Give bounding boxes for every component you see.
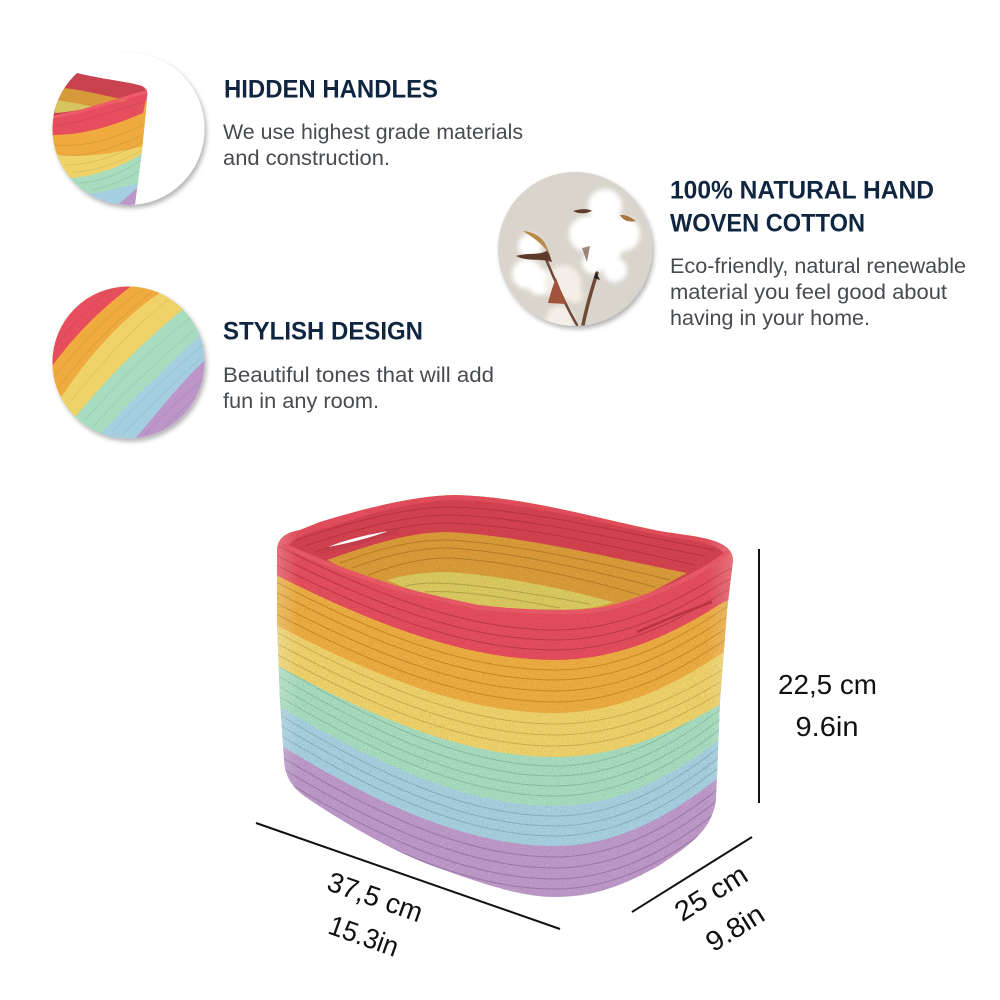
- heading: natural hand woven cotton: 100% NATURAL HAND: [670, 176, 934, 204]
- text block: stylish design description: Beautiful tones that will add: [223, 364, 494, 387]
- band: blue: [277, 628, 724, 846]
- illustration: rainbow rope basket: [277, 495, 733, 897]
- dimension: length label: 37,5 cm: [323, 866, 427, 928]
- text block: hidden handles description: We use highest grade materials: [223, 121, 523, 144]
- text block: cotton description: Eco-friendly, natural renewable: [670, 255, 966, 278]
- dimension: height line: [758, 549, 760, 803]
- text block: stylish design description: fun in any room.: [223, 390, 379, 413]
- heading: stylish design: STYLISH DESIGN: [223, 318, 423, 346]
- dimension: width label: 9.8in: [700, 898, 770, 958]
- rope texture: [270, 490, 740, 900]
- rim edge: [285, 546, 727, 612]
- band: yellow: [270, 480, 735, 757]
- heading: natural hand woven cotton: [670, 176, 934, 238]
- dimension: width label: [669, 859, 770, 958]
- dimension: length label: [323, 866, 427, 963]
- dimension: length label: 15.3in: [325, 909, 403, 963]
- basket interior: [288, 500, 725, 612]
- dimension: height label: [778, 669, 877, 742]
- handle: left slot: [320, 531, 398, 552]
- panel: stylish design feature: [40, 280, 494, 445]
- panel: hidden handles feature: [40, 53, 523, 210]
- band: red rim: [277, 495, 733, 660]
- text block: stylish design description: [223, 364, 494, 413]
- band: mint: [277, 628, 724, 806]
- text block: hidden handles description: and construction.: [223, 147, 390, 170]
- band: purple: [277, 628, 724, 897]
- text block: hidden handles description: [223, 121, 523, 170]
- text block: cotton description: having in your home.: [670, 307, 870, 330]
- dimension: height label: 9.6in: [796, 711, 858, 742]
- icon: basket corner circle: [40, 53, 204, 210]
- heading: hidden handles: HIDDEN HANDLES: [224, 76, 438, 104]
- handle: right slot: [637, 602, 712, 632]
- icon: rainbow rope circle: [52, 286, 209, 444]
- band: orange: [270, 480, 735, 713]
- dimension: width label: 25 cm: [669, 859, 753, 927]
- heading: natural hand woven cotton: WOVEN COTTON: [670, 210, 865, 238]
- icon: cotton plant circle: [495, 170, 655, 334]
- dimension: height label: 22,5 cm: [778, 669, 877, 700]
- text block: cotton description: [670, 255, 966, 330]
- panel: natural cotton feature: [495, 170, 966, 334]
- dimension: length line: [256, 823, 560, 929]
- dimension: width line: [632, 837, 752, 912]
- text block: cotton description: material you feel good about: [670, 281, 947, 304]
